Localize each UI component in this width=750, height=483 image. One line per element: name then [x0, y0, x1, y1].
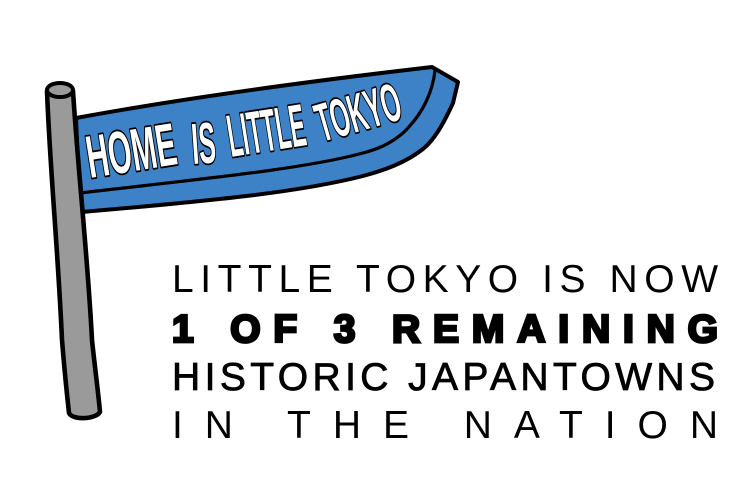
line 3: HISTORIC JAPANTOWNS	[172, 356, 715, 399]
line 2: emphasis: 1 OF 3 REMAINING	[172, 308, 718, 351]
flag banner: TOKYO	[309, 72, 408, 154]
flag pole	[47, 83, 100, 418]
flag banner	[76, 67, 458, 212]
headline text	[172, 258, 718, 447]
flag lettering: home is little tokyo: IS	[189, 110, 218, 177]
flag lettering: home is little tokyo: LITTLE	[223, 91, 310, 170]
line 4: IN THE NATION	[172, 404, 718, 447]
flag lettering: home is little tokyo	[82, 72, 408, 191]
line 1: LITTLE TOKYO IS NOW	[172, 258, 718, 301]
flag lettering: home is little tokyo: HOME	[82, 111, 181, 191]
